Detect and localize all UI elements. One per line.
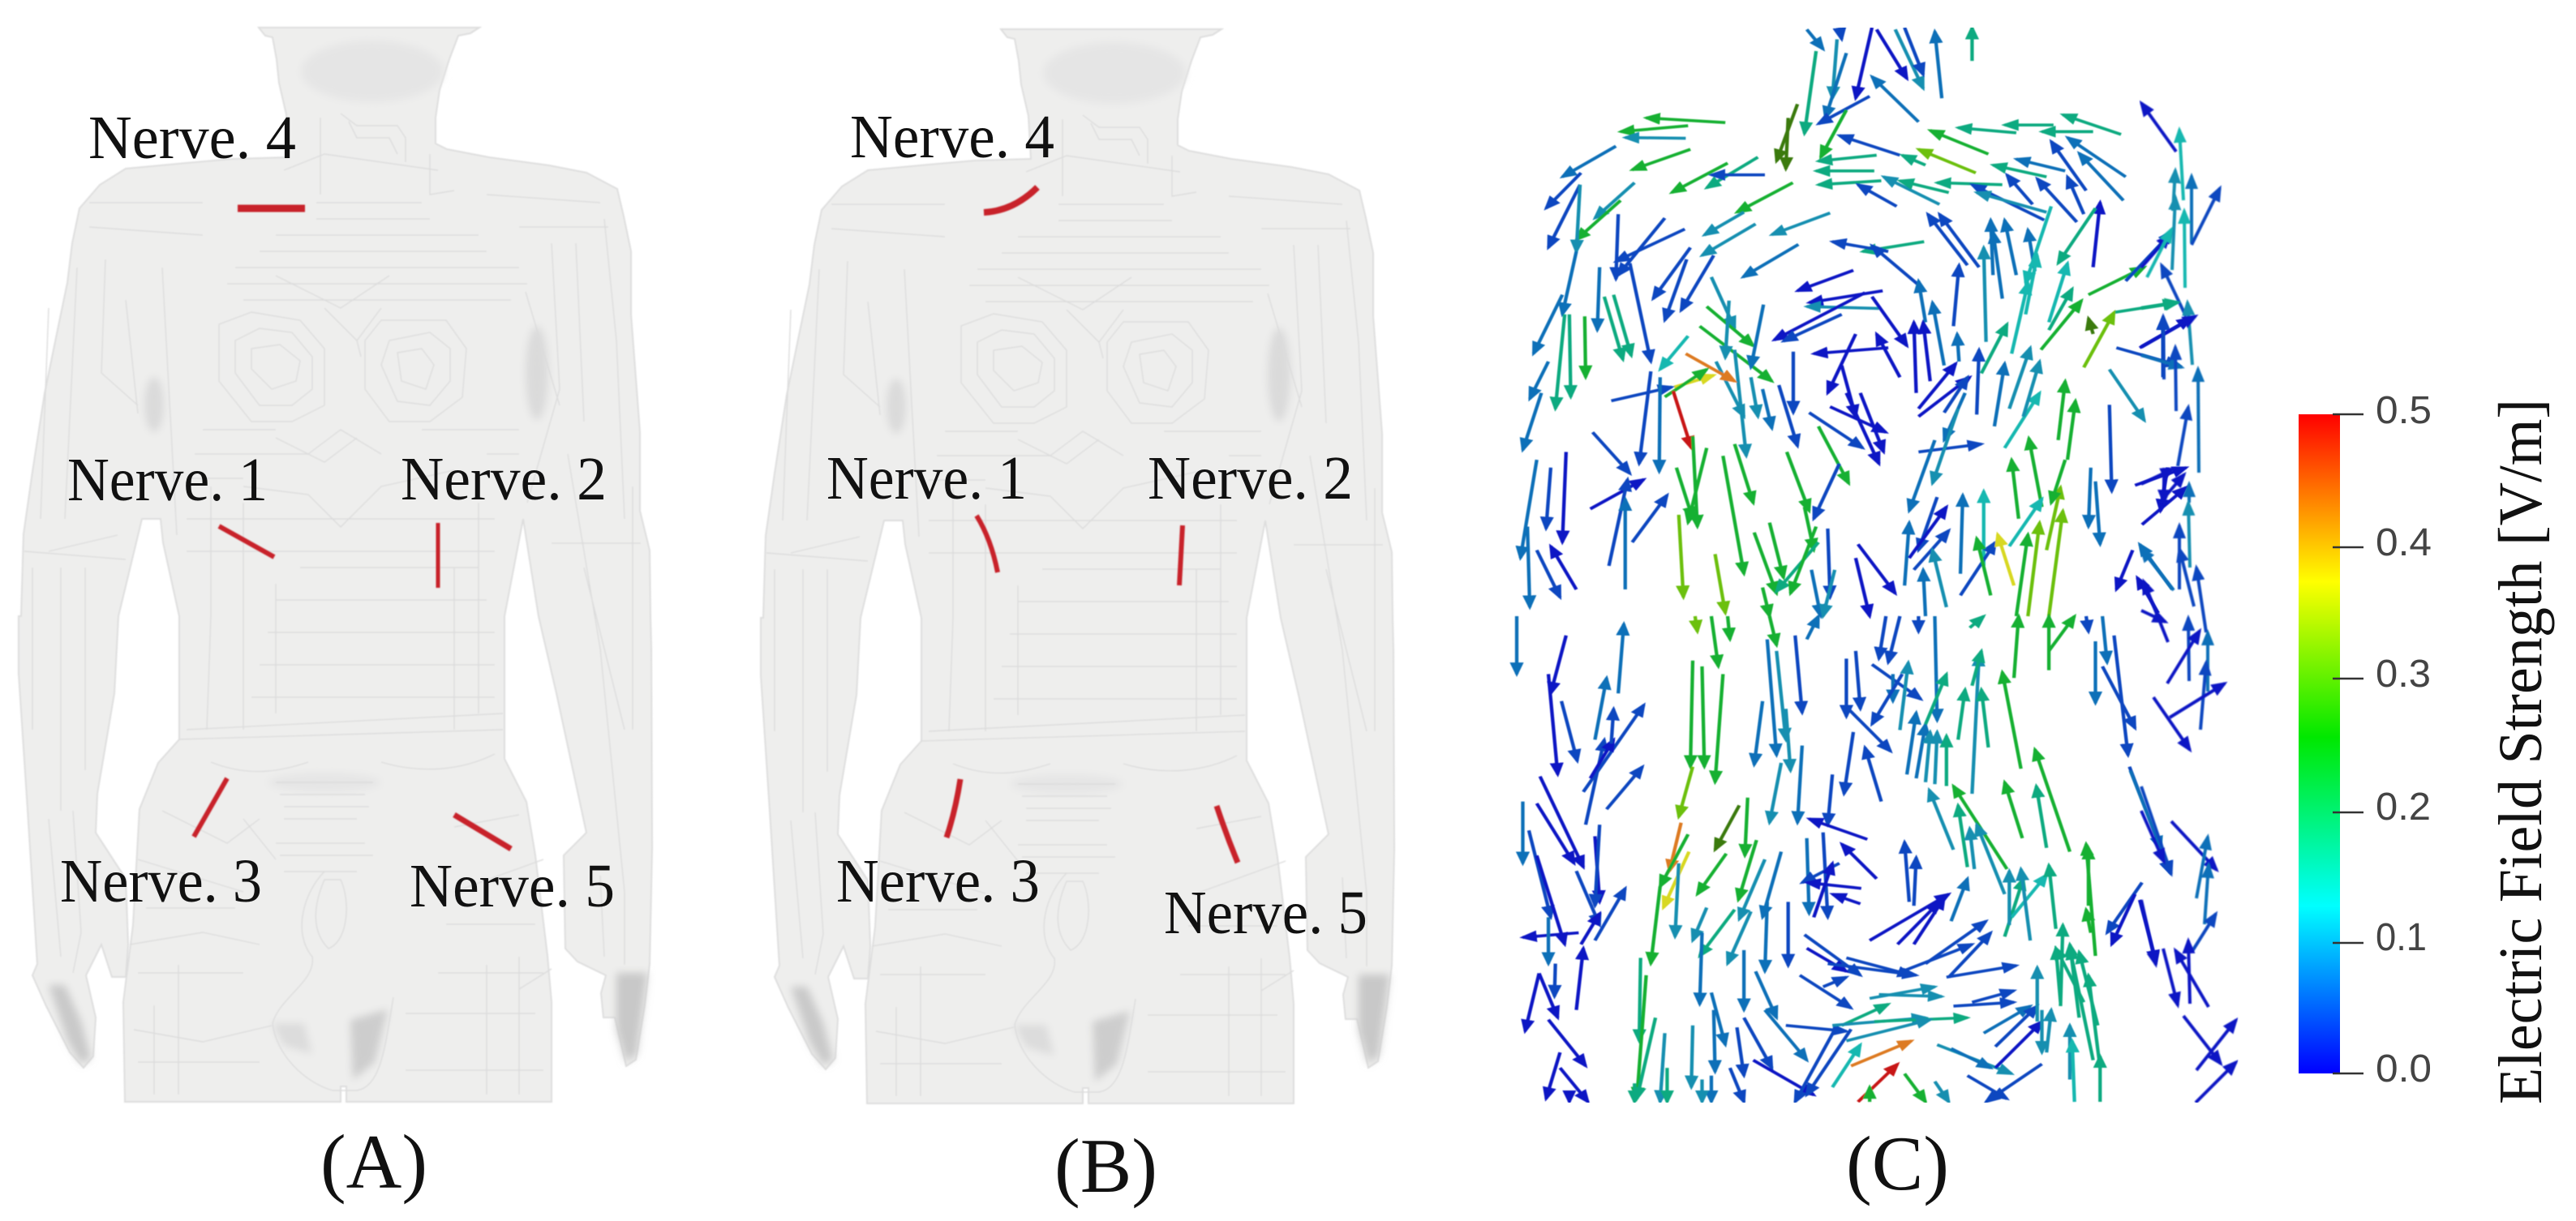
tick labels: 0.2 <box>2376 786 2431 829</box>
body model A <box>19 28 652 1102</box>
nerve labels B: Nerve. 3 <box>836 847 1040 915</box>
nerve segments B <box>947 187 1238 863</box>
nerve segments A <box>194 208 511 849</box>
colour bar <box>2299 414 2340 1073</box>
tick labels: 0.0 <box>2376 1047 2432 1090</box>
nerve labels B: Nerve. 5 <box>1164 879 1367 947</box>
colour scale legend <box>2299 389 2555 1104</box>
body model B <box>761 29 1394 1103</box>
caption B: (B) <box>1054 1123 1157 1209</box>
panel A: straight nerve model <box>19 28 652 1205</box>
nerve labels A: Nerve. 3 <box>60 847 262 915</box>
nerve labels B: Nerve. 1 <box>826 444 1027 512</box>
caption C: (C) <box>1846 1120 1949 1206</box>
tick labels: 0.4 <box>2376 521 2432 564</box>
upper body arrows <box>1521 28 2191 616</box>
nerve labels A <box>60 104 615 920</box>
nerve labels B <box>826 103 1367 947</box>
nerve labels B: Nerve. 4 <box>850 103 1054 171</box>
tick labels: 0.5 <box>2376 389 2432 432</box>
right arm arrows <box>2141 103 2236 1103</box>
nerve labels A: Nerve. 4 <box>88 104 296 172</box>
caption A: (A) <box>320 1119 427 1205</box>
tick labels <box>2376 389 2432 1090</box>
panel B: curved nerve model <box>761 29 1394 1209</box>
colour bar ticks <box>2333 414 2363 1073</box>
tick labels: 0.3 <box>2376 653 2431 696</box>
nerve labels A: Nerve. 1 <box>67 446 268 514</box>
tick labels: 0.1 <box>2376 916 2427 959</box>
nerve labels B: Nerve. 2 <box>1148 444 1353 512</box>
panel C: electric field vector arrows <box>1517 28 2236 1103</box>
axis title: Electric Field Strength [V/m] <box>2487 399 2555 1104</box>
nerve labels A: Nerve. 2 <box>401 445 607 513</box>
lower body arrows <box>1517 616 2170 1102</box>
nerve labels A: Nerve. 5 <box>410 852 615 920</box>
